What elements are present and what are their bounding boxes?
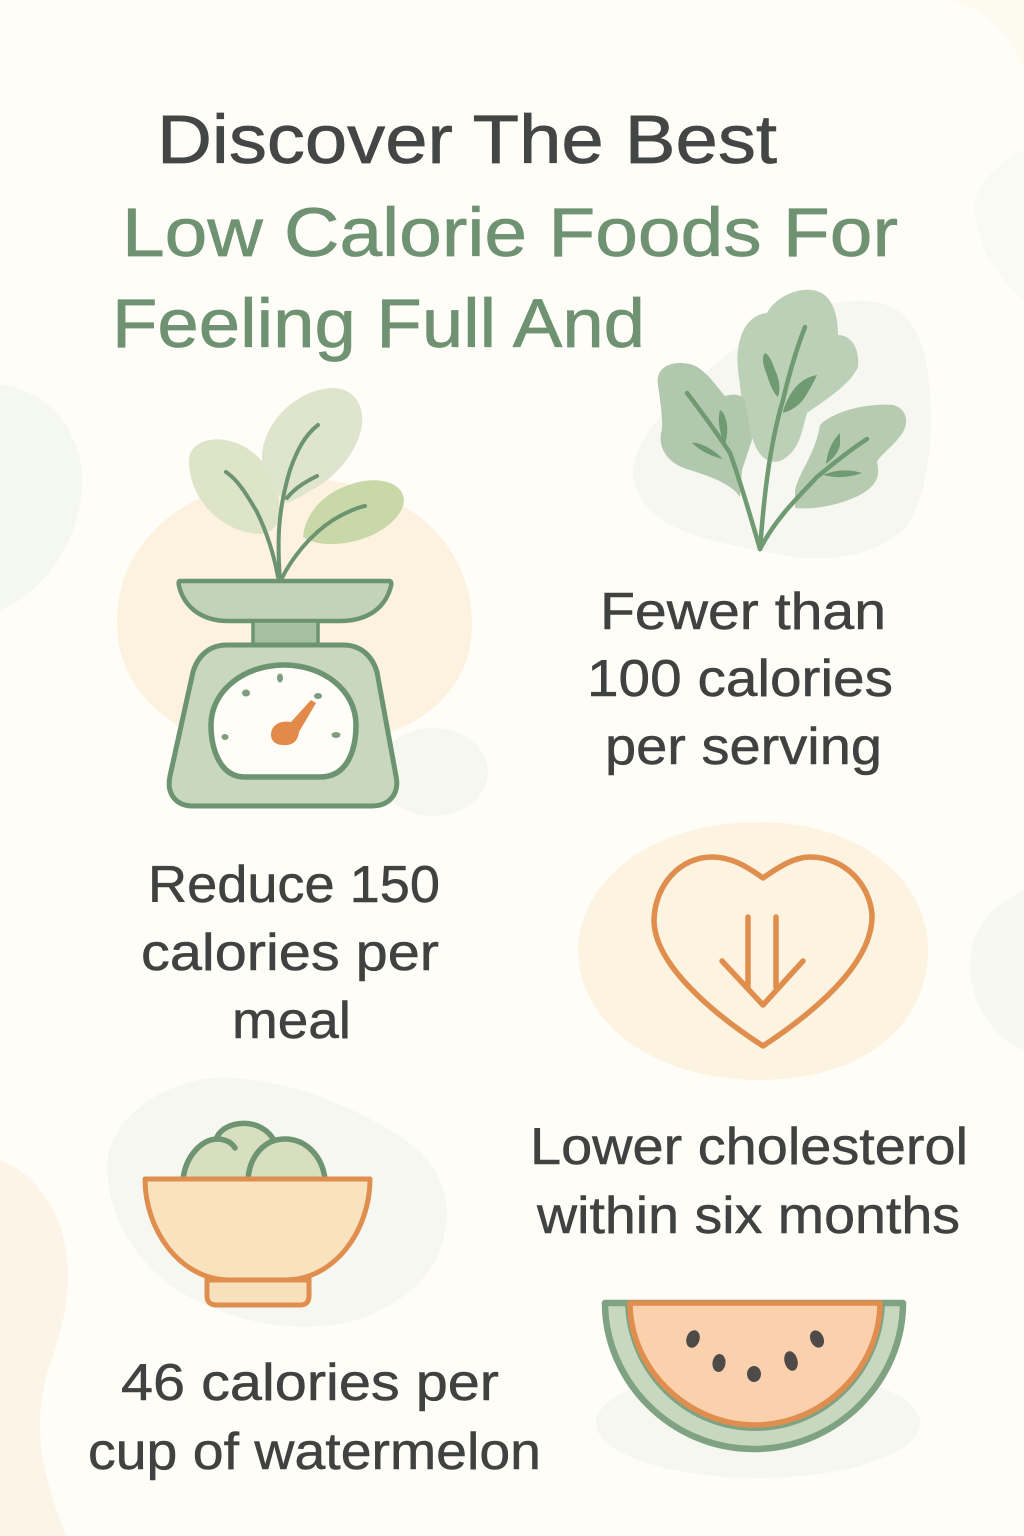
title: Discover The Best <box>157 101 777 178</box>
text: fewer than 100 calories: per serving <box>605 718 882 776</box>
text: fewer than 100 calories: Fewer than <box>600 583 886 641</box>
title <box>112 101 898 362</box>
icon: watermelon slice <box>596 1300 920 1478</box>
text: reduce 150 calories: Reduce 150 <box>148 856 440 914</box>
text: lower cholesterol: within six months <box>536 1187 960 1245</box>
text: lower cholesterol <box>530 1118 968 1245</box>
text: 46 calories per cup <box>88 1354 541 1481</box>
text: 46 calories per cup: 46 calories per <box>121 1354 499 1412</box>
title: Feeling Full And <box>112 285 645 362</box>
text: 46 calories per cup: cup of watermelon <box>88 1423 541 1481</box>
title: Low Calorie Foods For <box>122 194 898 271</box>
icon: leafy greens <box>633 290 931 558</box>
text: fewer than 100 calories <box>587 583 893 776</box>
text: fewer than 100 calories: 100 calories <box>587 650 893 708</box>
text: reduce 150 calories: meal <box>232 992 351 1050</box>
text: reduce 150 calories <box>141 856 440 1050</box>
text: lower cholesterol: Lower cholesterol <box>530 1118 968 1176</box>
text: reduce 150 calories: calories per <box>141 924 439 982</box>
icon: plant on kitchen scale <box>117 388 488 816</box>
icon: heart with down arrow <box>578 822 928 1080</box>
icon: bowl of greens <box>107 1078 447 1327</box>
